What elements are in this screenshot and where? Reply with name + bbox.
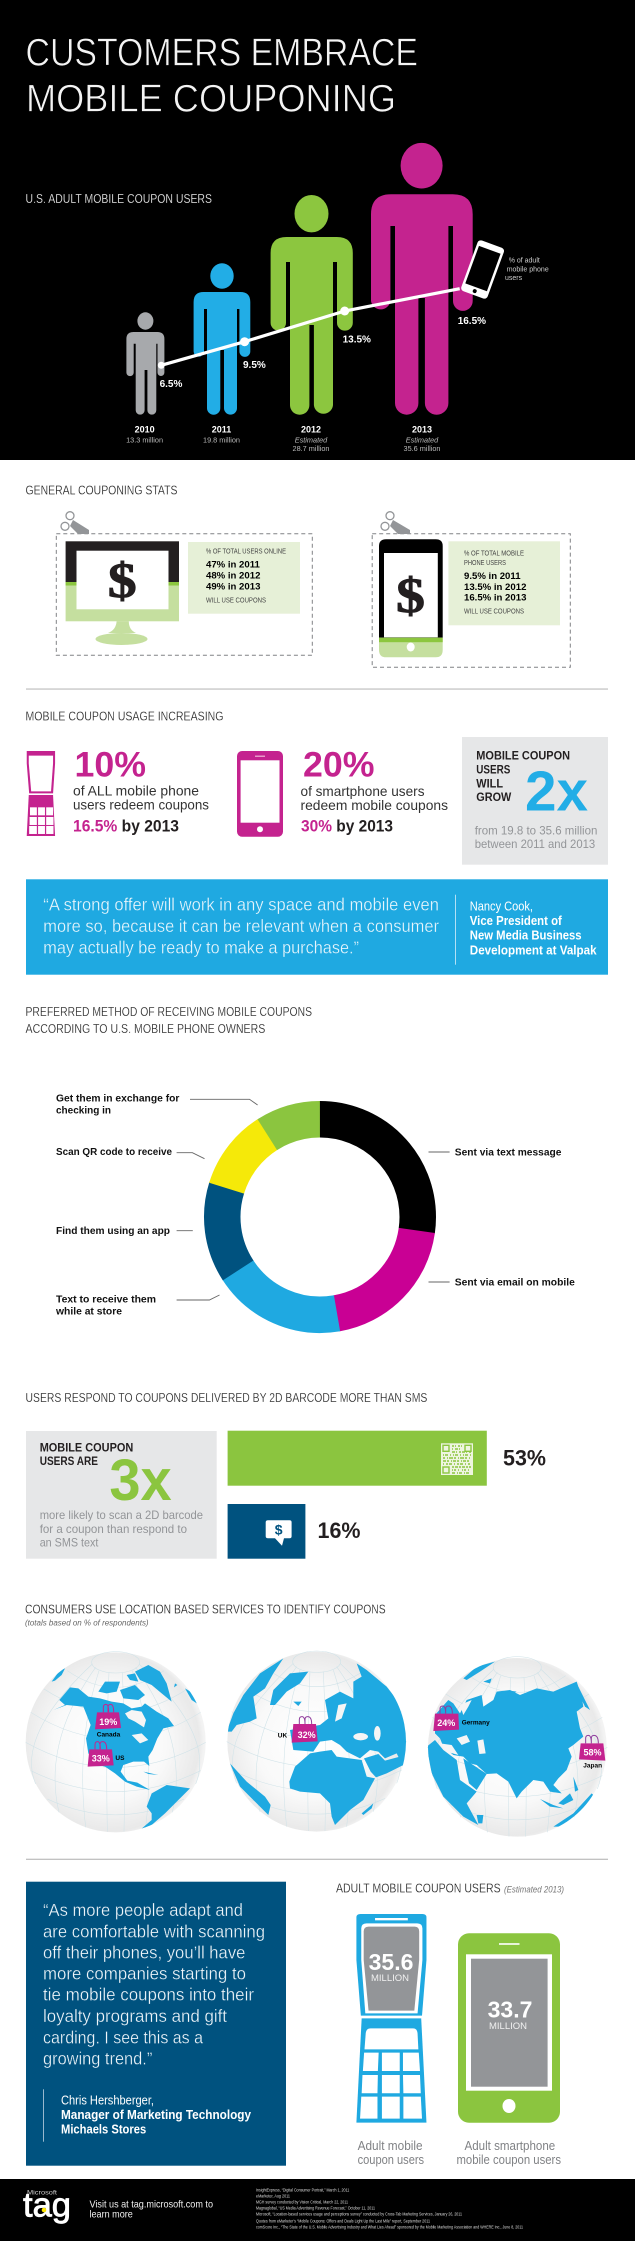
quote panel: Chris Hershberger: more companies starting to [43, 1964, 246, 1984]
globe: Europe and Africa [227, 1651, 410, 1832]
icon: smartphone [458, 1933, 560, 2123]
callout: 2x growth: MOBILE COUPON [476, 749, 570, 763]
callout: 3x: for a coupon than respond to [40, 1522, 187, 1536]
globe: Asia [427, 1657, 607, 1837]
stats text: 48% in 2012 [206, 570, 260, 581]
stats text: WILL USE COUPONS [464, 609, 524, 616]
callout: 3x [26, 1431, 217, 1559]
phone captions: coupon users [358, 2153, 424, 2167]
panel: mobile coupon usage increasing [26, 710, 608, 975]
quote panel: Chris Hershberger: are comfortable with scanning [43, 1921, 265, 1941]
stat: 20%: of smartphone users [300, 783, 424, 799]
quote panel: Nancy Cook [26, 879, 608, 975]
donut labels: Sent via text message [455, 1148, 562, 1159]
title: CUSTOMERS EMBRACE [26, 32, 418, 75]
donut chart [185, 1082, 455, 1352]
globe: Asia: Japan [583, 1762, 602, 1769]
subtitle: U.S. ADULT MOBILE COUPON USERS [26, 192, 212, 206]
stat: 20%: redeem mobile coupons [300, 797, 448, 813]
globe: Europe and Africa: 32% [298, 1730, 316, 1740]
year labels: Estimated [406, 436, 439, 445]
stats text [448, 541, 560, 625]
globe: Europe and Africa: UK [278, 1732, 287, 1739]
heading: GENERAL COUPONING STATS [26, 483, 178, 497]
donut labels: Sent via email on mobile [455, 1278, 575, 1289]
panel: general couponing stats [26, 483, 570, 667]
quote panel: Nancy Cook: more so, because it can be relevant when a consumer [43, 916, 439, 936]
icon: tilted phone [460, 239, 505, 300]
percent labels: 9.5% [243, 360, 266, 371]
figure: 2010 [126, 312, 164, 415]
year labels: Estimated [295, 436, 328, 445]
stats text: 9.5% in 2011 [464, 571, 521, 582]
stat: 10% [73, 746, 209, 836]
year labels: 19.8 million [203, 436, 240, 445]
heading: MOBILE COUPON USAGE INCREASING [26, 710, 224, 724]
stat: 10%: of ALL mobile phone [73, 782, 199, 798]
icon: smartphone: 33.7 [488, 1996, 532, 2022]
donut labels: while at store [55, 1306, 122, 1317]
call to action: Visit us at tag.microsoft.com to [90, 2199, 213, 2211]
quote panel: Chris Hershberger: off their phones, you’ll have [43, 1942, 245, 1962]
icon: monitor [66, 541, 179, 645]
callout: 2x growth [462, 737, 608, 865]
globe: North America: US [115, 1755, 125, 1762]
phone note: users [505, 275, 523, 282]
sources: Quotes from eMarketer’s “Mobile Coupons: Offers and Deals Light Up the Last Mile” report, September 2011 [256, 2218, 431, 2223]
year labels: 2012 [301, 425, 321, 435]
figure: 2012 [271, 195, 353, 415]
phone note [505, 258, 549, 282]
stat: 10%: 10% [74, 746, 146, 785]
bar: 2D barcode 53%: 53% [503, 1446, 546, 1471]
stat: 20%: 30% by 2013 [301, 818, 393, 836]
sources: MGH survey conducted by Vision Critical, March 22, 2011 [256, 2199, 349, 2204]
quote panel: Chris Hershberger: Michaels Stores [61, 2123, 146, 2137]
phone captions [358, 2139, 561, 2167]
phone captions: mobile coupon users [456, 2153, 561, 2167]
year labels: 13.3 million [126, 436, 163, 445]
stats text: % OF TOTAL USERS ONLINE [206, 549, 286, 556]
quote panel: Chris Hershberger: carding. I see this as a [43, 2027, 203, 2047]
call to action: learn more [90, 2209, 133, 2221]
callout: 3x: MOBILE COUPON [40, 1440, 133, 1454]
heading: (Estimated 2013) [504, 1885, 564, 1896]
year labels: 2013 [412, 425, 432, 435]
bag: US [88, 1742, 114, 1767]
coupon: mobile [372, 512, 570, 667]
globe: Asia: 24% [437, 1718, 455, 1728]
quote panel: Chris Hershberger [26, 1882, 286, 2166]
globe: North America: 19% [99, 1717, 117, 1727]
phone note: mobile phone [507, 267, 549, 274]
icon: flip phone: MILLION [371, 1973, 409, 1984]
panel: location based services [25, 1603, 607, 1837]
icon: flip phone: 35.6 [369, 1949, 413, 1975]
callout: 3x: 3x [109, 1448, 172, 1513]
heading: ADULT MOBILE COUPON USERS [336, 1882, 501, 1896]
heading: ACCORDING TO U.S. MOBILE PHONE OWNERS [26, 1022, 265, 1036]
callout: 3x: USERS ARE [40, 1454, 98, 1468]
globe: North America: 33% [92, 1754, 110, 1764]
sources: Magnaglobal, “US Media Advertising Revenue Forecast,” October 11, 2011 [256, 2205, 376, 2210]
percent labels: 16.5% [458, 316, 486, 327]
icon: flip phone [356, 1914, 426, 2123]
percent labels [160, 316, 486, 390]
panel: adult mobile coupon users [336, 1882, 564, 2167]
quote panel: Nancy Cook: Development at Valpak [470, 943, 597, 957]
icon: smartphone [237, 751, 283, 837]
globe: Asia: Germany [462, 1720, 490, 1727]
bag: Germany [433, 1706, 459, 1731]
callout: 2x growth: USERS [476, 763, 510, 777]
bar: SMS 16%: 16% [318, 1518, 360, 1543]
callout: 2x growth: WILL [476, 776, 503, 790]
stats text: % OF TOTAL MOBILE [464, 550, 524, 557]
stats text: 13.5% in 2012 [464, 582, 526, 593]
stat: 10%: users redeem coupons [73, 796, 209, 812]
callout: 2x growth: GROW [476, 790, 512, 804]
bag: Canada [95, 1704, 121, 1729]
heading: PREFERRED METHOD OF RECEIVING MOBILE COUPONS [26, 1005, 312, 1019]
phone captions: Adult mobile [358, 2139, 423, 2153]
donut labels: Scan QR code to receive [56, 1147, 172, 1158]
icon: smartphone: $ [396, 567, 425, 623]
quote panel: Chris Hershberger: growing trend.” [43, 2048, 152, 2068]
quote panel: Chris Hershberger: Chris Hershberger, [61, 2093, 154, 2107]
bar: 2D barcode 53% [228, 1431, 546, 1486]
stats text: 47% in 2011 [206, 560, 261, 571]
coupon: online [56, 512, 312, 655]
sources: eMarketer, Aug 2011 [256, 2193, 291, 2198]
heading: CONSUMERS USE LOCATION BASED SERVICES TO IDENTIFY COUPONS [25, 1603, 386, 1617]
donut labels: Find them using an app [56, 1226, 170, 1237]
logo: Microsoft Tag: Microsoft [27, 2189, 57, 2196]
year labels: 28.7 million [293, 444, 329, 453]
callout: 3x: more likely to scan a 2D barcode [40, 1508, 203, 1522]
stats text: WILL USE COUPONS [206, 597, 266, 604]
sources: Microsoft, “Location-based services usage and perceptions survey” conducted by Cross-Tab Marketing Services, January 26, 2011 [256, 2212, 462, 2217]
quote panel: Nancy Cook: may actually be ready to make a purchase.” [43, 937, 359, 957]
bag: Japan [579, 1735, 605, 1761]
heading [26, 1005, 312, 1036]
quote panel: Chris Hershberger: tie mobile coupons into their [43, 1985, 254, 2005]
donut labels: Text to receive them [56, 1295, 156, 1306]
stats text [188, 542, 300, 614]
figure: 2011 [194, 263, 250, 415]
callout: 2x growth: from 19.8 to 35.6 million [475, 823, 597, 837]
leader lines [177, 1099, 450, 1300]
sources: InsightExpress, “Digital Consumer Portrait,” March 1, 2011 [256, 2188, 350, 2192]
stat: 20% [300, 746, 448, 836]
globe: North America [26, 1652, 206, 1832]
quote panel: Chris Hershberger: Manager of Marketing Technology [61, 2108, 251, 2122]
icon: speech bubble: $ [275, 1522, 283, 1538]
sources: comScore Inc., “The State of the U.S. Mobile Advertising Industry and What Lies Ahead” sponsored by the Mobile Marketing Association and WHERE Inc., June 8, 2011 [256, 2224, 524, 2229]
globe: Asia: 58% [583, 1748, 602, 1758]
sources [256, 2188, 524, 2229]
header panel [0, 0, 635, 460]
icon: scissors [61, 512, 89, 534]
bar: SMS 16% [228, 1504, 360, 1559]
icon: QR code [441, 1443, 473, 1475]
quote panel: Nancy Cook: Vice President of [470, 914, 563, 928]
trend line [158, 289, 460, 369]
quote panel: Nancy Cook: Nancy Cook, [470, 900, 533, 914]
logo: Microsoft Tag: tag [23, 2187, 71, 2225]
icon: monitor: $ [108, 552, 137, 608]
year labels: 2011 [212, 425, 231, 435]
stats text: 16.5% in 2013 [464, 593, 526, 604]
quote panel: Chris Hershberger: loyalty programs and gift [43, 2006, 227, 2026]
panel: 2D barcode vs SMS [26, 1391, 546, 1559]
year labels: 35.6 million [404, 444, 440, 453]
stat: 20%: 20% [303, 746, 374, 785]
footer [0, 2179, 635, 2241]
panel: preferred method [26, 1005, 575, 1352]
quote panel: Nancy Cook: New Media Business [470, 929, 582, 943]
icon: scissors [381, 512, 410, 534]
globe: North America: Canada [97, 1731, 121, 1738]
stats text: 49% in 2013 [206, 581, 260, 592]
title [26, 32, 418, 121]
icon: flip phone [27, 751, 55, 836]
icon: smartphone [379, 539, 443, 657]
percent labels: 6.5% [160, 379, 183, 390]
stats text: PHONE USERS [464, 560, 506, 567]
subheading: (totals based on % of respondents) [25, 1618, 149, 1628]
icon: smartphone: MILLION [489, 2021, 527, 2032]
percent labels: 13.5% [343, 335, 371, 346]
phone captions: Adult smartphone [464, 2139, 555, 2153]
callout: 2x growth: between 2011 and 2013 [475, 837, 595, 851]
quote panel: Chris Hershberger: “As more people adapt and [43, 1900, 243, 1920]
donut labels [55, 1094, 575, 1317]
figure: 2013 [371, 143, 473, 415]
donut labels: checking in [56, 1105, 111, 1116]
callout: 3x: an SMS text [40, 1536, 99, 1550]
stat: 10%: 16.5% by 2013 [73, 818, 179, 836]
heading: USERS RESPOND TO COUPONS DELIVERED BY 2D BARCODE MORE THAN SMS [26, 1391, 427, 1405]
phone note: % of adult [509, 258, 540, 265]
call to action [90, 2199, 213, 2221]
title: MOBILE COUPONING [26, 78, 396, 121]
callout: 2x growth: 2x [525, 760, 588, 824]
year labels [126, 425, 440, 453]
year labels: 2010 [135, 425, 155, 435]
quote panel: Nancy Cook: “A strong offer will work in any space and mobile even [43, 895, 439, 915]
donut labels: Get them in exchange for [56, 1094, 180, 1105]
bag: UK [292, 1717, 318, 1743]
